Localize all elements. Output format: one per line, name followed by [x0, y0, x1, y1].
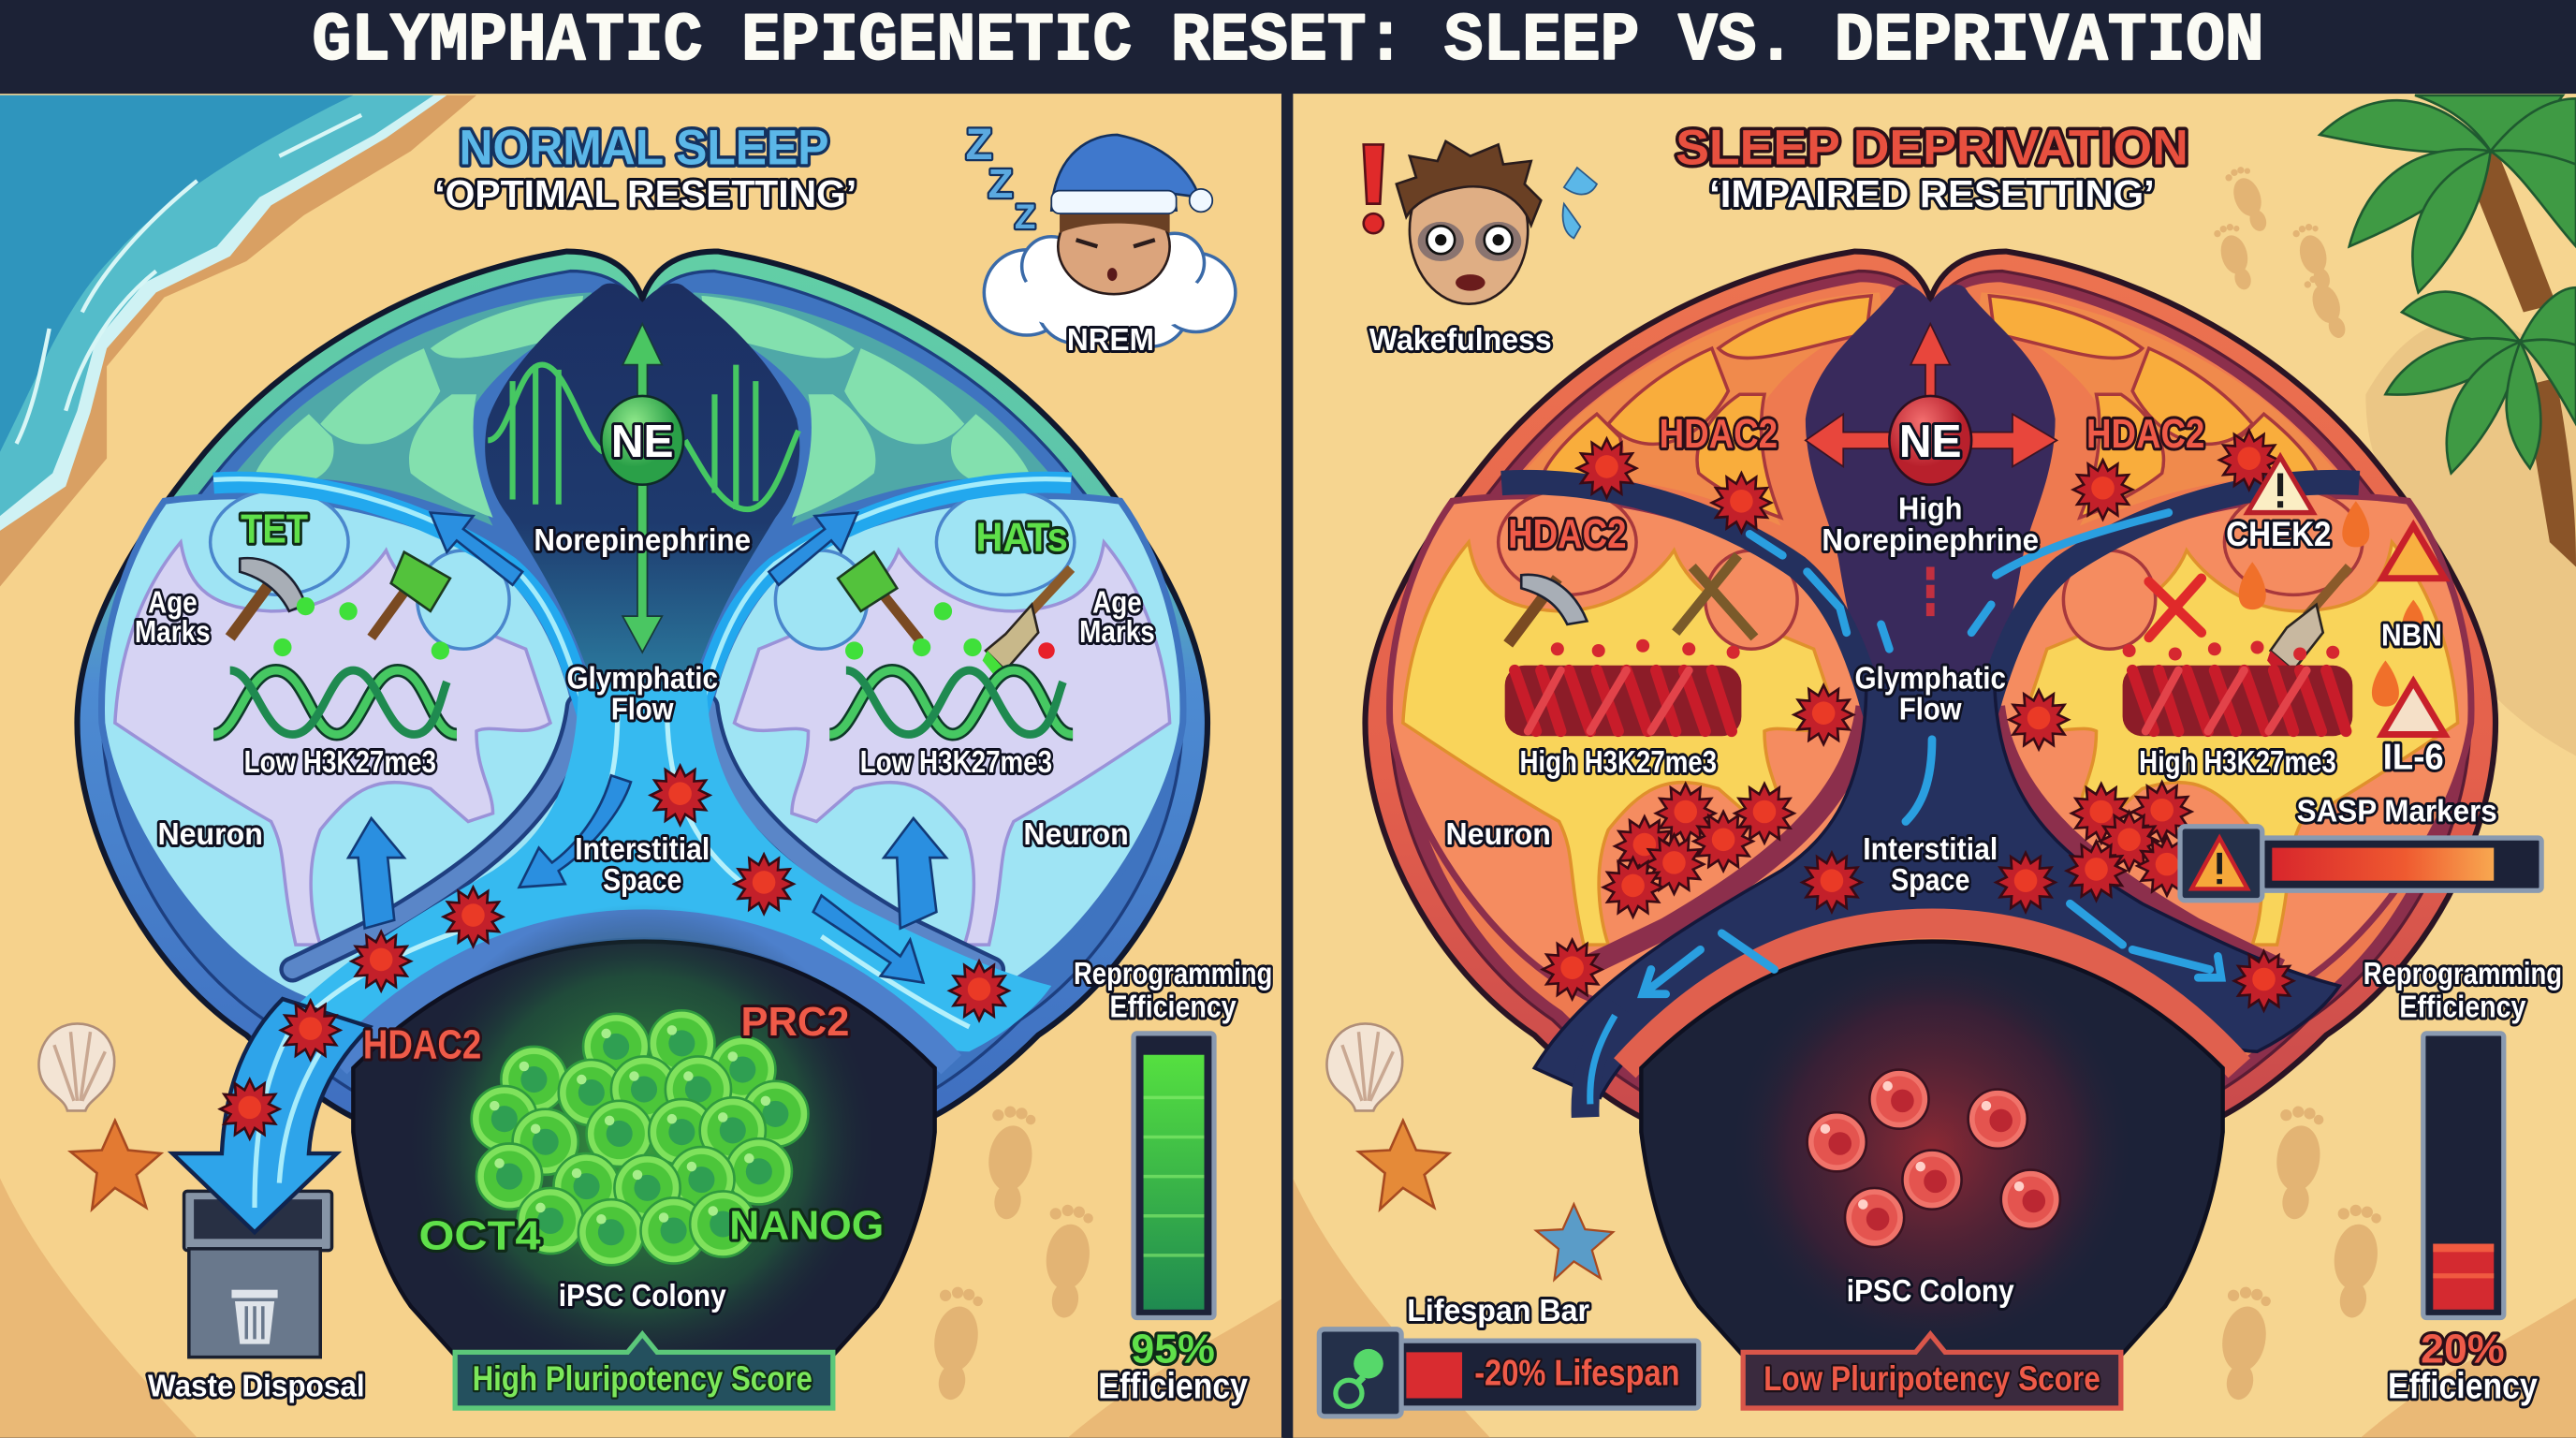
headings: sleep deprivation: ‘IMPAIRED RESETTING’ — [1709, 172, 2155, 215]
DNA helix right, low H3K27me3 — [829, 670, 1073, 734]
labels: normal sleep brain: Glymphatic — [567, 661, 718, 696]
background: left beach panel — [0, 94, 1283, 1438]
NE sphere — [601, 396, 683, 485]
labels: normal sleep brain: TET — [241, 506, 308, 552]
labels: sleep deprivation brain: Wakefulness — [1369, 323, 1552, 358]
green marks — [273, 597, 449, 660]
efficiency meter 95%: Efficiency — [1098, 1367, 1248, 1407]
NE red with arrows — [1806, 324, 2056, 621]
lifespan bar — [1319, 1294, 1699, 1416]
cortex gyri — [1510, 292, 2351, 526]
HDAC2 aggregates in flow — [220, 766, 1009, 1138]
labels: normal sleep brain: Neuron — [157, 817, 263, 852]
NE vertical arrow — [622, 324, 662, 653]
left neuron region — [102, 490, 578, 1003]
labels: normal sleep brain: HATs — [976, 514, 1068, 560]
norepinephrine NE, oscillating: NE — [611, 417, 674, 467]
icons: warning triangles and flames — [2239, 457, 2445, 734]
gray hammer — [230, 558, 305, 638]
blue flow arrows — [348, 513, 946, 983]
background: ocean — [0, 95, 446, 531]
icon: palm trees — [2320, 95, 2576, 566]
constricted flow channels — [1501, 482, 2359, 1097]
labels: sleep deprivation brain: Interstitial — [1863, 832, 1998, 867]
headings: normal sleep: ‘OPTIMAL RESETTING’ — [434, 172, 856, 215]
colony dome ring — [1625, 923, 2239, 1068]
lifespan bar: Lifespan Bar — [1407, 1294, 1589, 1328]
headings: normal sleep: NORMAL SLEEP — [460, 120, 828, 175]
labels: normal sleep brain: HDAC2 — [363, 1022, 481, 1068]
iPSC colony, red — [1641, 942, 2223, 1356]
efficiency meter 95%: Efficiency — [1110, 990, 1237, 1024]
headings: normal sleep — [434, 120, 856, 215]
labels: normal sleep brain — [135, 323, 1155, 1404]
efficiency meter 20% — [2364, 957, 2562, 1407]
efficiency meter 20%: 20% — [2421, 1326, 2505, 1372]
left neuron region — [1390, 490, 1866, 1003]
green hammer — [372, 552, 450, 638]
iPSC colony, green — [353, 903, 935, 1380]
icon: sleeping head on cloud: Z — [988, 161, 1013, 207]
NE red with arrows: NE — [1899, 417, 1962, 467]
big flow arrow into bin — [172, 999, 370, 1232]
labels: sleep deprivation brain: Norepinephrine — [1822, 523, 2039, 558]
labels: sleep deprivation brain: HDAC2 — [2086, 411, 2204, 457]
icon: exhausted awake head — [1364, 141, 1597, 304]
right neuron region — [707, 490, 1183, 1003]
labels: sleep deprivation brain: Space — [1891, 863, 1969, 898]
labels: normal sleep brain: NANOG — [729, 1203, 884, 1249]
efficiency meter 95%: Reprogramming — [1074, 957, 1272, 991]
cyan sluggish flow arrows — [1643, 513, 2221, 994]
central ventricle — [485, 284, 799, 682]
panel: normal sleep brain — [77, 252, 1208, 1117]
membrane arcs — [292, 707, 992, 969]
headings: sleep deprivation — [1676, 120, 2188, 215]
efficiency meter 95%: 95% — [1131, 1326, 1215, 1372]
icon: sleeping head on cloud — [966, 120, 1236, 346]
labels: sleep deprivation brain: High H3K27me3 — [1519, 745, 1717, 780]
brain outer ring, hot — [1365, 252, 2496, 1117]
labels: normal sleep brain: PRC2 — [741, 999, 849, 1045]
small stalled flow arrow — [1585, 1005, 1618, 1117]
background: right beach panel — [1293, 94, 2576, 1438]
labels: normal sleep brain: NREM — [1067, 323, 1154, 358]
labels: sleep deprivation brain: iPSC Colony — [1847, 1274, 2014, 1309]
labels: normal sleep brain: Norepinephrine — [534, 523, 751, 558]
brain inner body — [1405, 282, 2456, 1087]
waste disposal bin — [184, 1191, 332, 1357]
central dark ventricle — [1806, 285, 2056, 682]
labels: normal sleep brain: Low H3K27me3 — [860, 745, 1052, 780]
labels: normal sleep brain: Age — [1092, 586, 1142, 621]
labels: normal sleep brain: Flow — [611, 693, 674, 727]
decor: right beach shells, starfish, footprints — [1326, 164, 2384, 1402]
helper enzymes left: TET hammers and marks — [230, 552, 450, 660]
high pluripotency score badge — [455, 1334, 833, 1408]
labels: sleep deprivation brain: High H3K27me3 — [2139, 745, 2336, 780]
labels: sleep deprivation brain — [1369, 323, 2444, 1309]
brain inner maroon rim — [1391, 271, 2470, 1098]
labels: sleep deprivation brain: CHEK2 — [2226, 515, 2331, 553]
labels: sleep deprivation brain: HDAC2 — [1508, 511, 1627, 557]
brain inner body — [103, 271, 1182, 1098]
labels: normal sleep brain: Marks — [135, 615, 211, 650]
NE oscillation waves — [488, 365, 798, 509]
labels: normal sleep brain: Waste Disposal — [148, 1370, 365, 1404]
efficiency meter 20%: Efficiency — [2399, 990, 2526, 1024]
title bar: GLYMPHATIC EPIGENETIC RESET: SLEEP VS. DEPRIVATION — [312, 3, 2264, 80]
labels: normal sleep brain: Low H3K27me3 — [244, 745, 436, 780]
decor: left beach shells, starfish, footprints — [38, 1023, 1096, 1402]
low pluripotency score badge: Low Pluripotency Score — [1764, 1359, 2100, 1398]
labels: sleep deprivation brain: IL-6 — [2383, 738, 2444, 778]
headings: sleep deprivation: SLEEP DEPRIVATION — [1676, 120, 2188, 175]
tools, fire and tangled chromatin right — [2123, 566, 2352, 736]
labels: sleep deprivation brain: High — [1898, 492, 1962, 527]
labels: sleep deprivation brain: NBN — [2381, 619, 2442, 653]
icon: sleeping head on cloud: Z — [1015, 198, 1035, 236]
cortex gyri — [222, 292, 1063, 526]
SASP markers meter: SASP Markers — [2297, 794, 2497, 829]
icon: sleeping head on cloud: Z — [966, 120, 993, 169]
helper enzymes right: HATs hammer and brush — [838, 552, 1071, 677]
labels: normal sleep brain: Neuron — [1023, 817, 1129, 852]
high pluripotency score badge: High Pluripotency Score — [473, 1359, 812, 1398]
labels: normal sleep brain: Interstitial — [575, 832, 710, 867]
labels: normal sleep brain: Space — [603, 863, 681, 898]
labels: normal sleep brain: Age — [148, 586, 198, 621]
lifespan bar: -20% Lifespan — [1474, 1354, 1680, 1394]
labels: normal sleep brain: Marks — [1079, 615, 1155, 650]
panel: sleep deprivation brain — [1365, 252, 2496, 1117]
labels: normal sleep brain: OCT4 — [419, 1212, 541, 1258]
DNA helix left, low H3K27me3 — [213, 670, 457, 734]
labels: normal sleep brain: iPSC Colony — [559, 1279, 726, 1313]
labels: sleep deprivation brain: Flow — [1899, 693, 1962, 727]
efficiency meter 95% — [1074, 957, 1272, 1407]
labels: sleep deprivation brain: Glymphatic — [1855, 661, 2006, 696]
glymphatic flow channels — [213, 479, 1071, 1097]
membrane arcs — [1580, 707, 2280, 969]
brain outer ring — [77, 252, 1208, 1117]
SASP markers meter — [2180, 794, 2541, 901]
low pluripotency score badge — [1743, 1334, 2121, 1408]
efficiency meter 20%: Efficiency — [2388, 1367, 2538, 1407]
labels: sleep deprivation brain: HDAC2 — [1660, 411, 1778, 457]
HDAC2 aggregates, accumulating — [1543, 431, 2293, 1010]
labels: sleep deprivation brain: Neuron — [1445, 817, 1551, 852]
colony dome ring — [337, 923, 951, 1064]
norepinephrine NE, oscillating — [488, 324, 798, 653]
tools and tangled chromatin left — [1505, 555, 1754, 736]
right neuron region — [1995, 490, 2471, 1003]
